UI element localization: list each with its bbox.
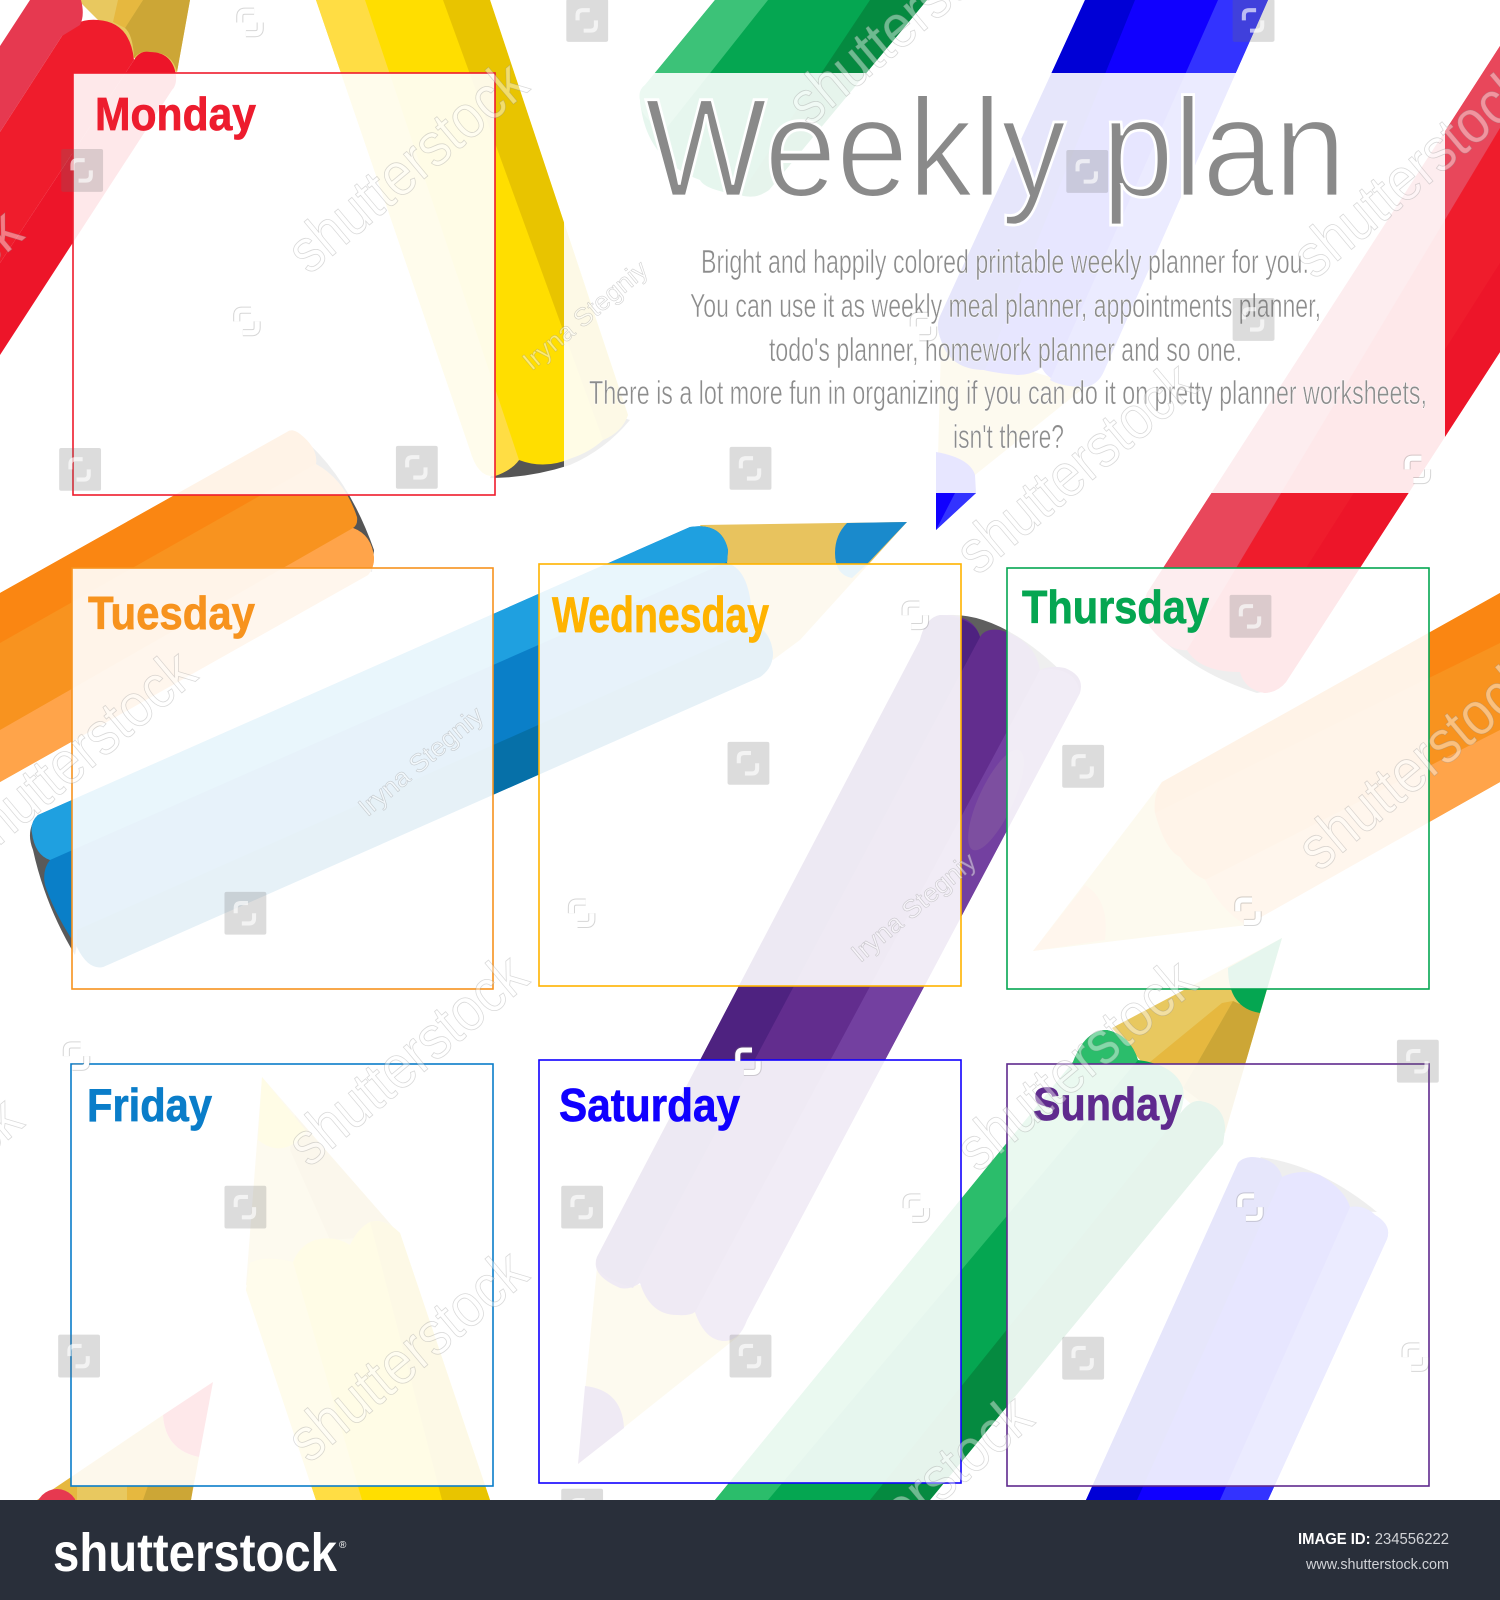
pencil: green, top	[640, 0, 927, 197]
panel: Wednesday	[539, 564, 961, 986]
pencil: orange, right	[1033, 593, 1500, 951]
pencil: cyan blue, middle	[30, 522, 907, 967]
pencil: red, top-left end	[0, 0, 190, 355]
watermark overlay: shutterstock	[274, 940, 540, 1178]
pencil: yellow, top	[316, 0, 630, 478]
pencil: green, bottom right	[715, 938, 1282, 1500]
website: www.shutterstock.com	[1305, 1556, 1449, 1573]
footer logo: shutterstock: shutterstock	[53, 1523, 338, 1583]
registered mark: ®	[339, 1540, 347, 1551]
watermark overlay: Iryna Stegniy	[517, 255, 654, 376]
watermark overlay: shutterstock	[274, 47, 540, 285]
pencil: blue, bottom	[1086, 1157, 1388, 1500]
panel: title area wash	[564, 73, 1445, 493]
pencil: red, right side	[1144, 46, 1500, 693]
image id: IMAGE ID: 234556222	[1298, 1531, 1449, 1548]
pencil: purple	[578, 615, 1081, 1464]
watermark overlay: shutterstock	[942, 945, 1208, 1183]
description text	[589, 243, 1427, 455]
heading: Thursday: Thursday	[1022, 581, 1209, 633]
watermark overlay: shutterstock	[942, 348, 1208, 586]
heading: Wednesday: Wednesday	[552, 587, 769, 643]
footer bar	[0, 1500, 1500, 1600]
pencil: red tip, bottom-left	[36, 1382, 213, 1531]
heading: Sunday: Sunday	[1033, 1078, 1182, 1130]
panel: Tuesday	[72, 568, 493, 989]
panel: Sunday	[1007, 1064, 1429, 1486]
pencil: yellow, bottom	[246, 1077, 490, 1500]
pencil: orange, left	[0, 430, 374, 782]
panel: Saturday	[539, 1060, 961, 1483]
panel: Friday	[71, 1064, 493, 1486]
panel: Monday	[73, 73, 495, 495]
heading: Friday: Friday	[87, 1079, 212, 1131]
pencil: blue, top	[936, 0, 1268, 530]
description text: isn't there?	[953, 418, 1064, 455]
title: Weekly plan	[645, 69, 1346, 226]
panel: Thursday	[1007, 568, 1429, 989]
watermark overlay: Iryna Stegniy	[846, 847, 982, 968]
heading: Saturday: Saturday	[559, 1079, 740, 1131]
heading: Monday: Monday	[95, 88, 256, 140]
description text: todo's planner, homework planner and so one.	[769, 331, 1242, 368]
watermark overlay: Iryna Stegniy	[353, 701, 489, 822]
heading: Tuesday: Tuesday	[88, 587, 255, 639]
watermark overlay: shutterstock	[274, 1236, 540, 1474]
